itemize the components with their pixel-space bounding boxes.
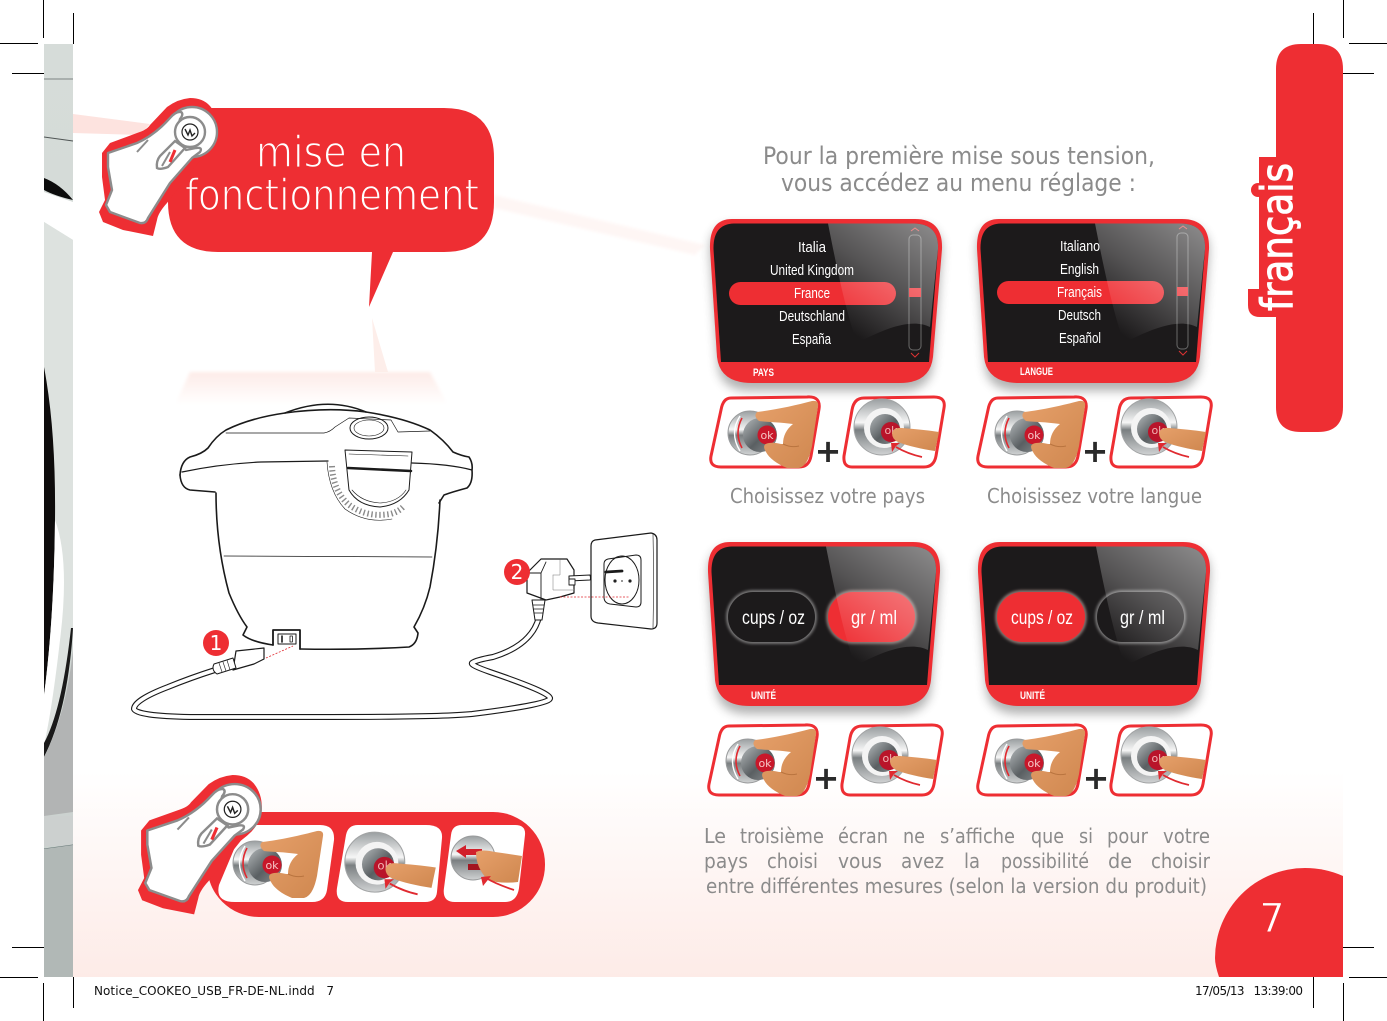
cooker lid (180, 404, 472, 503)
controls row 2 right: + (1083, 759, 1109, 797)
handle (327, 450, 412, 520)
screen: unité gr/ml: cups / oz (742, 608, 805, 629)
note paragraph: pays (704, 849, 748, 873)
screen: unité cups/oz (978, 542, 1210, 714)
screen: langue: Français (1057, 284, 1102, 301)
print slug right: 17/05/13 13:39:00 (1195, 984, 1303, 998)
note paragraph: si (1079, 824, 1093, 848)
screen: unité gr/ml: UNITÉ (751, 689, 776, 702)
title: mise en (256, 127, 406, 178)
screen: pays: United Kingdom (770, 262, 854, 279)
icon: hand on knob (99, 98, 218, 236)
note paragraph: choisi (767, 849, 818, 873)
controls row 2 left: + (813, 759, 839, 797)
intro heading (763, 142, 1155, 197)
card: press knob (337, 825, 442, 902)
plug 1 (213, 648, 264, 674)
controls row 2 right (978, 725, 1211, 797)
note paragraph: Le (704, 824, 726, 848)
note paragraph: pour (1107, 824, 1149, 848)
connection guides (266, 597, 630, 658)
screen: pays: France (794, 285, 830, 302)
screen: langue: Español (1059, 330, 1101, 347)
intro heading: vous accédez au menu réglage : (781, 169, 1136, 197)
screen: unité cups/oz: gr / ml (1120, 608, 1165, 629)
screen: langue: Deutsch (1058, 307, 1101, 324)
badge 1: 1 (210, 631, 222, 655)
plug 2 (527, 559, 590, 620)
page number badge: 7 (1259, 896, 1285, 942)
screen: pays: España (792, 331, 832, 348)
title (185, 127, 479, 221)
controls row 1 right: + (1082, 432, 1108, 470)
badge 2 (504, 559, 530, 585)
controls row 1 right (978, 397, 1211, 470)
cooker body (216, 493, 440, 649)
wall socket (591, 533, 657, 629)
decorative ribbon (73, 114, 705, 405)
page number badge (1215, 868, 1343, 977)
caption: langue: Choisissez votre langue (987, 484, 1202, 508)
controls row 1 left: + (815, 432, 841, 470)
note paragraph (704, 824, 1211, 898)
note paragraph: troisième (740, 824, 824, 848)
power cord (134, 617, 550, 717)
screen: langue: English (1060, 261, 1099, 278)
language tab (1248, 44, 1343, 432)
note paragraph: choisir (1151, 849, 1211, 873)
screen: pays: PAYS (753, 367, 774, 379)
screen: unité gr/ml: gr / ml (851, 608, 897, 629)
note paragraph: ne (903, 824, 925, 848)
note paragraph: écran (838, 824, 888, 848)
footer controls panel (138, 775, 545, 917)
print slug left: Notice_COOKEO_USB_FR-DE-NL.indd 7 (94, 984, 334, 998)
card: turn knob (218, 825, 334, 902)
controls row 2 left (709, 725, 942, 797)
note paragraph: la (964, 849, 980, 873)
screen: unité cups/oz: UNITÉ (1020, 689, 1045, 702)
language tab: français (1252, 163, 1303, 311)
screen: langue: LANGUE (1020, 366, 1053, 378)
note paragraph: avez (901, 849, 944, 873)
screen: pays: Deutschland (779, 308, 845, 325)
intro heading: Pour la première mise sous tension, (763, 142, 1155, 170)
screen: unité gr/ml (708, 542, 940, 714)
screen: langue (977, 219, 1209, 391)
badge 1 (203, 630, 229, 656)
left photo strip (44, 44, 73, 977)
caption: pays: Choisissez votre pays (730, 484, 925, 508)
card: back button (444, 825, 525, 902)
socket (273, 630, 300, 649)
note paragraph: de (1108, 849, 1132, 873)
note paragraph: s’affiche (940, 824, 1015, 848)
screen: langue: Italiano (1060, 238, 1100, 255)
icon: hand on knob (138, 775, 262, 914)
note paragraph: possibilité (1001, 849, 1089, 873)
screen: unité cups/oz: cups / oz (1011, 608, 1073, 629)
title: fonctionnement (185, 170, 479, 221)
badge 2: 2 (511, 560, 523, 584)
note paragraph: votre (1163, 824, 1210, 848)
screen: pays (710, 219, 942, 391)
illustration: cooker with cord (134, 404, 657, 717)
controls row 1 left (711, 397, 944, 470)
note paragraph: que (1031, 824, 1064, 848)
header bubble: mise en fonctionnement (99, 98, 494, 307)
screen: pays: Italia (798, 239, 827, 256)
note paragraph: entre différentes mesures (selon la version du produit) (706, 874, 1207, 898)
note paragraph: vous (838, 849, 882, 873)
